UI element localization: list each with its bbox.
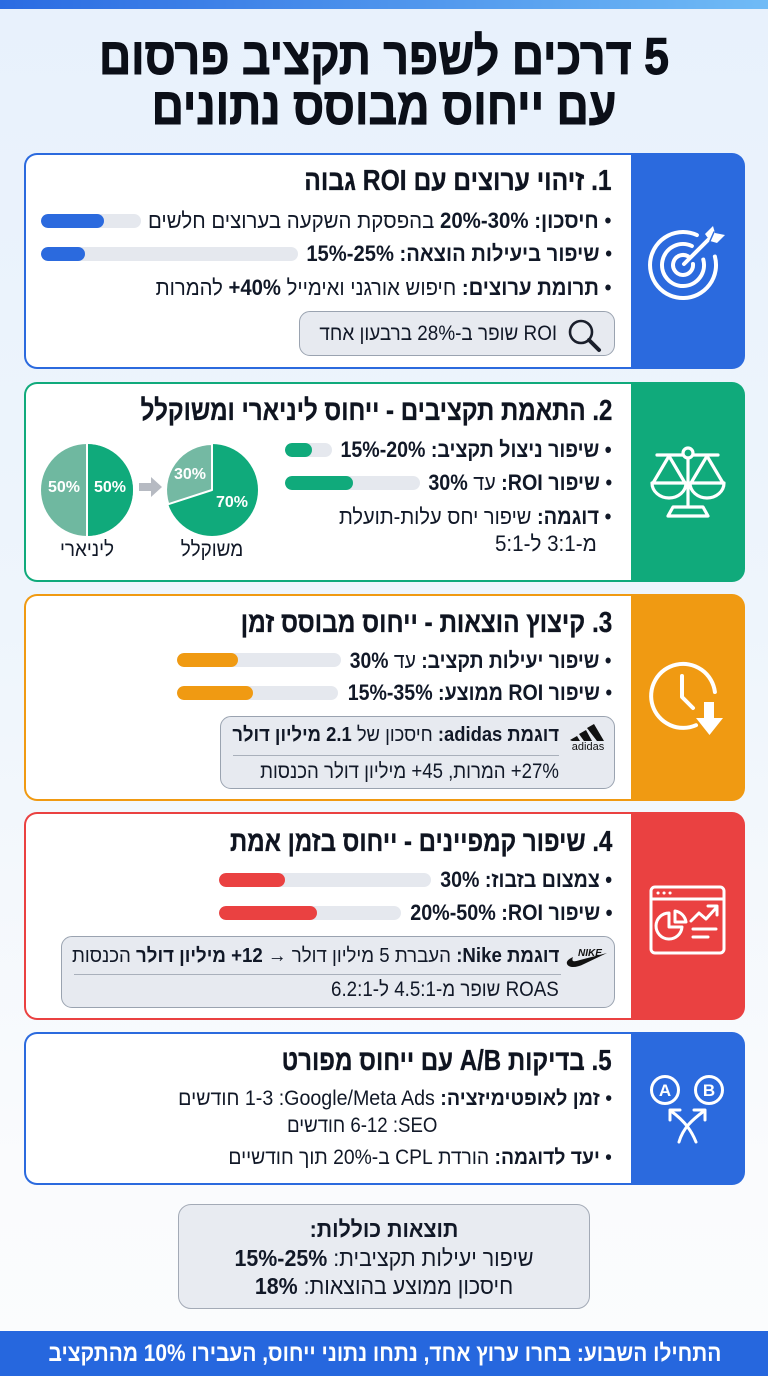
summary text bbox=[234, 1216, 533, 1299]
ROI bullet: • שיפור ROI: 50%-20% bbox=[410, 900, 612, 925]
callout: Nike example bbox=[61, 936, 615, 1008]
budget efficiency bullet: • שיפור יעילות תקציב: עד 30% bbox=[350, 648, 612, 673]
icon: target bbox=[648, 226, 725, 300]
adidas headline: דוגמת adidas: חיסכון של 2.1 מיליון דולר bbox=[232, 724, 559, 746]
SEO line: SEO: 6-12 חודשים bbox=[287, 1114, 437, 1137]
footer text: התחילו השבוע: בחרו ערוץ אחד, נתחו נתוני ייחוס, העבירו 10% מהתקציב bbox=[48, 1340, 721, 1367]
summary text: חיסכון ממוצע בהוצאות: 18% bbox=[255, 1273, 513, 1299]
savings bar bbox=[41, 214, 141, 228]
waste reduction bullet: • צמצום בזבוז: 30% bbox=[440, 867, 612, 892]
summary box bbox=[178, 1204, 590, 1309]
example bullet: • דוגמה: שיפור יחס עלות-תועלת bbox=[339, 504, 612, 529]
Nike logo: NIKE bbox=[578, 948, 602, 959]
waste reduction bar bbox=[219, 873, 431, 887]
panel: 3 time-based spend cut bbox=[24, 594, 745, 801]
panel: 2 budget matching bbox=[24, 382, 745, 582]
summary text: תוצאות כוללות: bbox=[310, 1216, 458, 1242]
top accent bar bbox=[0, 0, 768, 9]
heading 1: 1. זיהוי ערוצים עם ROI גבוה bbox=[305, 165, 612, 197]
optimisation time bullet: • זמן לאופטימיזציה: Google/Meta Ads: 1-3 חודשים bbox=[178, 1087, 612, 1110]
adidas logo bbox=[570, 724, 605, 752]
linear pie: 50% bbox=[48, 479, 80, 496]
icon: A/B split: B bbox=[703, 1081, 715, 1100]
Nike result: ROAS שופר מ-4.5:1 ל-6.2:1 bbox=[331, 978, 559, 1001]
arrow bbox=[139, 477, 162, 497]
label: weighted: משוקלל bbox=[181, 538, 243, 561]
average ROI bar bbox=[177, 686, 338, 700]
icon: A/B split: A bbox=[659, 1081, 671, 1100]
title: עם ייחוס מבוסס נתונים bbox=[152, 78, 616, 136]
callout: adidas example bbox=[220, 716, 615, 789]
title: 5 דרכים לשפר תקציב פרסום bbox=[99, 28, 669, 86]
panel: 5 A/B testing bbox=[24, 1032, 745, 1185]
budget efficiency bar bbox=[177, 653, 341, 667]
chart: attribution pies bbox=[41, 444, 258, 536]
linear pie: 50% bbox=[94, 479, 126, 496]
Nike headline: דוגמת Nike: העברת 5 מיליון דולר → 12+ מיליון דולר הכנסות bbox=[72, 945, 559, 967]
callout text: ROI שופר ב-28% ברבעון אחד bbox=[319, 322, 557, 345]
title bbox=[99, 28, 669, 136]
panel: 1 high ROI channels bbox=[24, 153, 745, 369]
weighted pie: 30% bbox=[174, 466, 206, 483]
icon: scales bbox=[650, 446, 726, 518]
budget utilisation bullet: • שיפור ניצול תקציב: 20%-15% bbox=[341, 437, 612, 462]
Nike logo bbox=[566, 948, 607, 967]
ROI bar bbox=[285, 476, 420, 490]
heading 3: 3. קיצוץ הוצאות - ייחוס מבוסס זמן bbox=[240, 607, 612, 639]
example second line: מ-3:1 ל-5:1 bbox=[495, 531, 597, 556]
spend efficiency bar bbox=[41, 247, 298, 261]
icon: analytics dashboard bbox=[650, 886, 726, 954]
spend efficiency bullet: • שיפור ביעילות הוצאה: 25%-15% bbox=[306, 241, 612, 266]
heading 2: 2. התאמת תקציבים - ייחוס ליניארי ומשוקלל bbox=[140, 395, 612, 427]
ROI bar bbox=[219, 906, 401, 920]
weighted pie bbox=[166, 444, 258, 536]
average ROI bullet: • שיפור ROI ממוצע: 35%-15% bbox=[347, 680, 612, 705]
label: linear: ליניארי bbox=[60, 538, 114, 561]
callout: ROI improved bbox=[299, 311, 615, 356]
budget utilisation bar bbox=[285, 443, 332, 457]
icon: clock with down arrow bbox=[649, 662, 723, 735]
linear pie bbox=[41, 444, 133, 536]
weighted pie: 70% bbox=[216, 494, 248, 511]
target example bullet: • יעד לדוגמה: הורדת CPL ב-20% תוך חודשיים bbox=[228, 1146, 612, 1169]
panel: 4 real-time campaign improvement bbox=[24, 812, 745, 1020]
heading 5: 5. בדיקות A/B עם ייחוס מפורט bbox=[282, 1045, 612, 1077]
summary text: שיפור יעילות תקציבית: 25%-15% bbox=[234, 1244, 533, 1270]
channel contribution bullet: • תרומת ערוצים: חיפוש אורגני ואימייל 40%+ להמרות bbox=[156, 275, 612, 300]
footer call to action bbox=[0, 1331, 768, 1376]
savings bullet: • חיסכון: 30%-20% בהפסקת השקעה בערוצים חלשים bbox=[148, 208, 612, 233]
ROI bullet: • שיפור ROI: עד 30% bbox=[428, 470, 612, 495]
icon: A/B split bbox=[650, 1075, 724, 1144]
icon: magnifier bbox=[568, 320, 602, 352]
heading 4: 4. שיפור קמפיינים - ייחוס בזמן אמת bbox=[230, 826, 612, 858]
adidas result: 27%+ המרות, 45+ מיליון דולר הכנסות bbox=[260, 760, 559, 783]
